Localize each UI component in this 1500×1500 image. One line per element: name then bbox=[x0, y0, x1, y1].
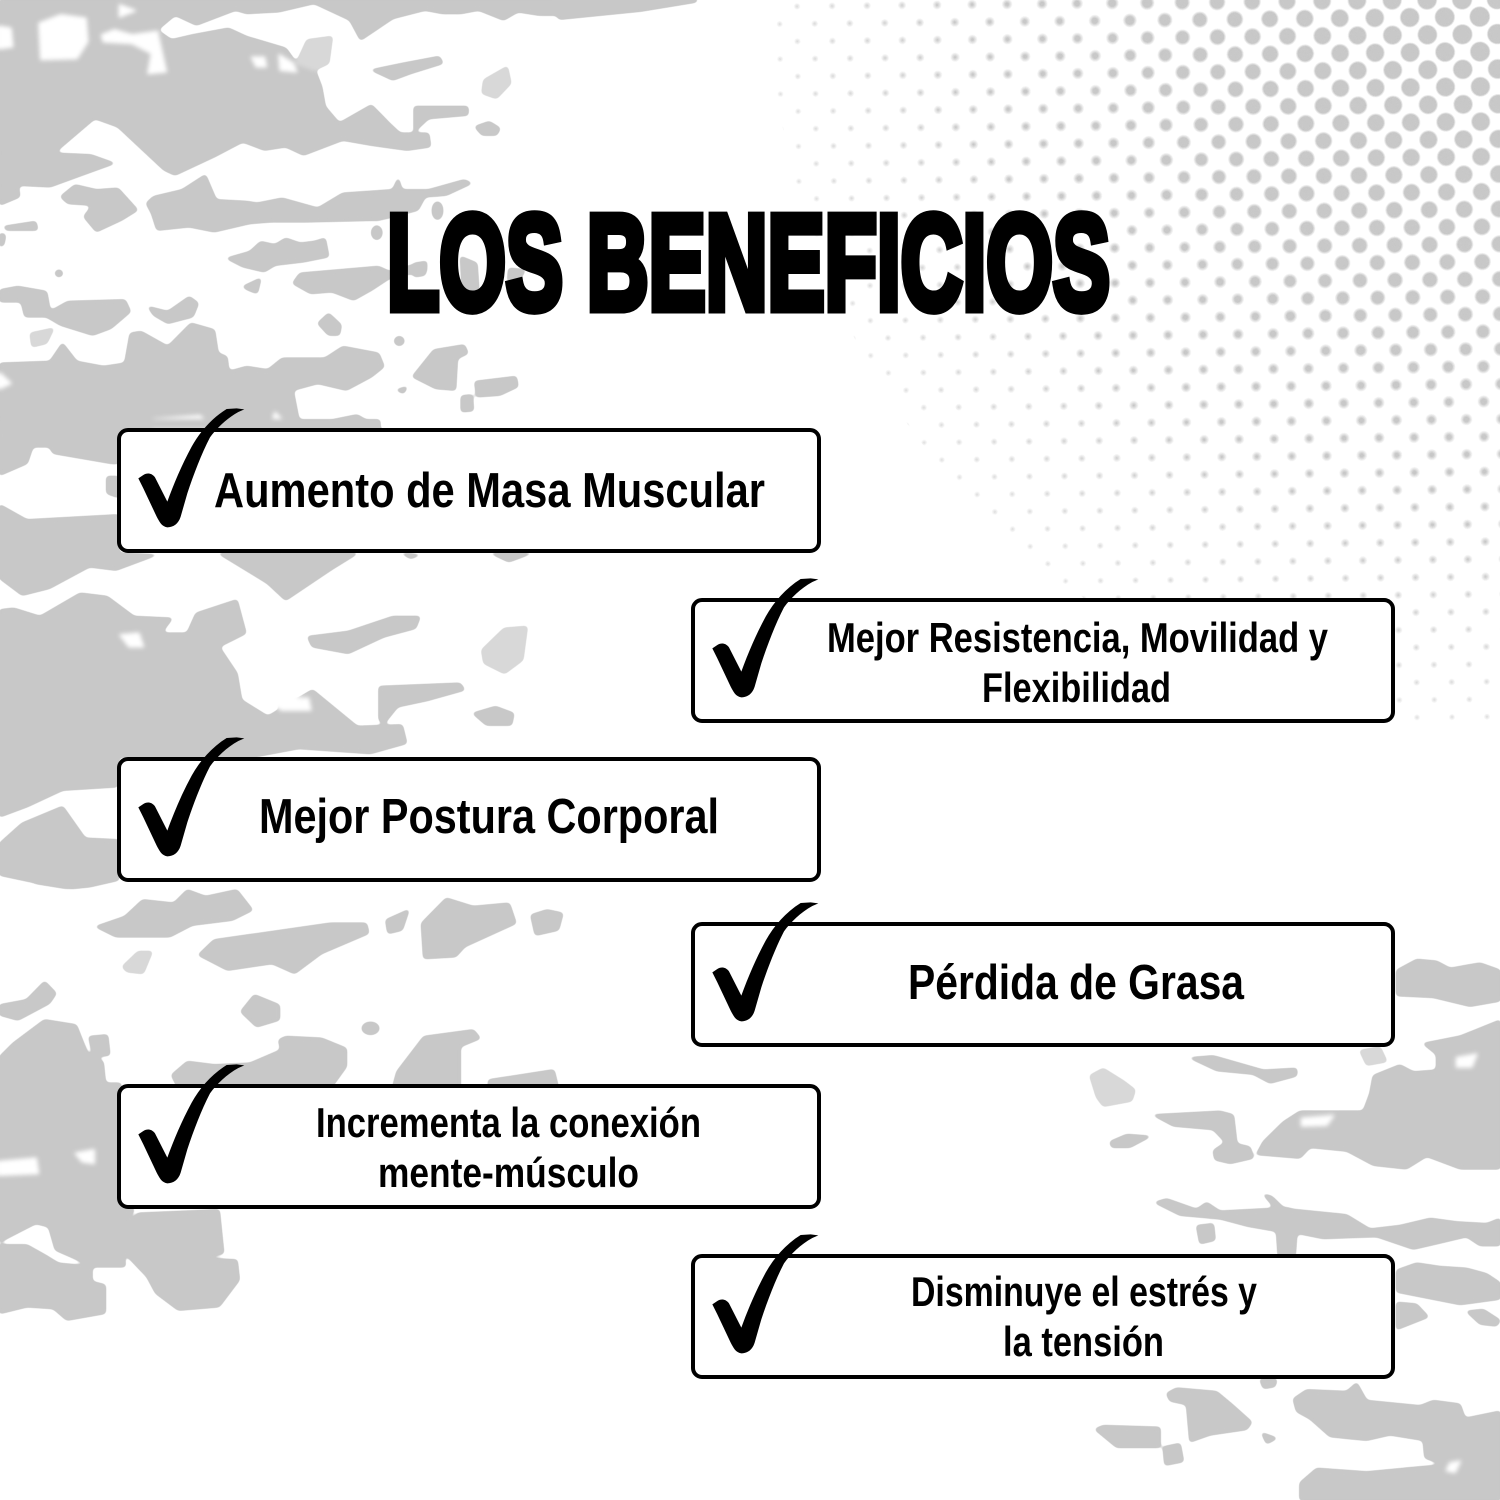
icon: check mark bbox=[712, 902, 818, 1021]
label: Mejor Resistencia, Movilidad y bbox=[827, 614, 1328, 661]
label bbox=[316, 1099, 701, 1196]
icon: check mark bbox=[712, 1234, 818, 1353]
label bbox=[911, 1268, 1257, 1365]
icon: check mark bbox=[138, 1064, 244, 1183]
label: Mejor Postura Corporal bbox=[259, 790, 719, 844]
label: la tensión bbox=[1003, 1318, 1164, 1365]
benefit 3: Mejor Postura Corporal bbox=[119, 737, 819, 880]
benefit 4: Pérdida de Grasa bbox=[693, 902, 1393, 1045]
icon: check mark bbox=[138, 737, 244, 856]
label: Pérdida de Grasa bbox=[908, 956, 1245, 1010]
label bbox=[827, 614, 1328, 711]
icon: check mark bbox=[712, 578, 818, 697]
benefit 2: Mejor Resistencia, Movilidad y Flexibilidad bbox=[693, 578, 1393, 721]
benefit 6: Disminuye el estrés y la tensión bbox=[693, 1234, 1393, 1377]
label: Incrementa la conexión bbox=[316, 1099, 701, 1146]
label: Aumento de Masa Muscular bbox=[214, 464, 765, 518]
icon: check mark bbox=[138, 408, 244, 527]
benefit 5: Incrementa la conexión mente-músculo bbox=[119, 1064, 819, 1207]
label: mente-músculo bbox=[378, 1149, 639, 1196]
label: Flexibilidad bbox=[982, 664, 1171, 711]
benefit 1: Aumento de Masa Muscular bbox=[119, 408, 819, 551]
halftone dot pattern bbox=[777, 0, 1500, 720]
label: Disminuye el estrés y bbox=[911, 1268, 1257, 1315]
title: LOS BENEFICIOS bbox=[387, 187, 1110, 338]
